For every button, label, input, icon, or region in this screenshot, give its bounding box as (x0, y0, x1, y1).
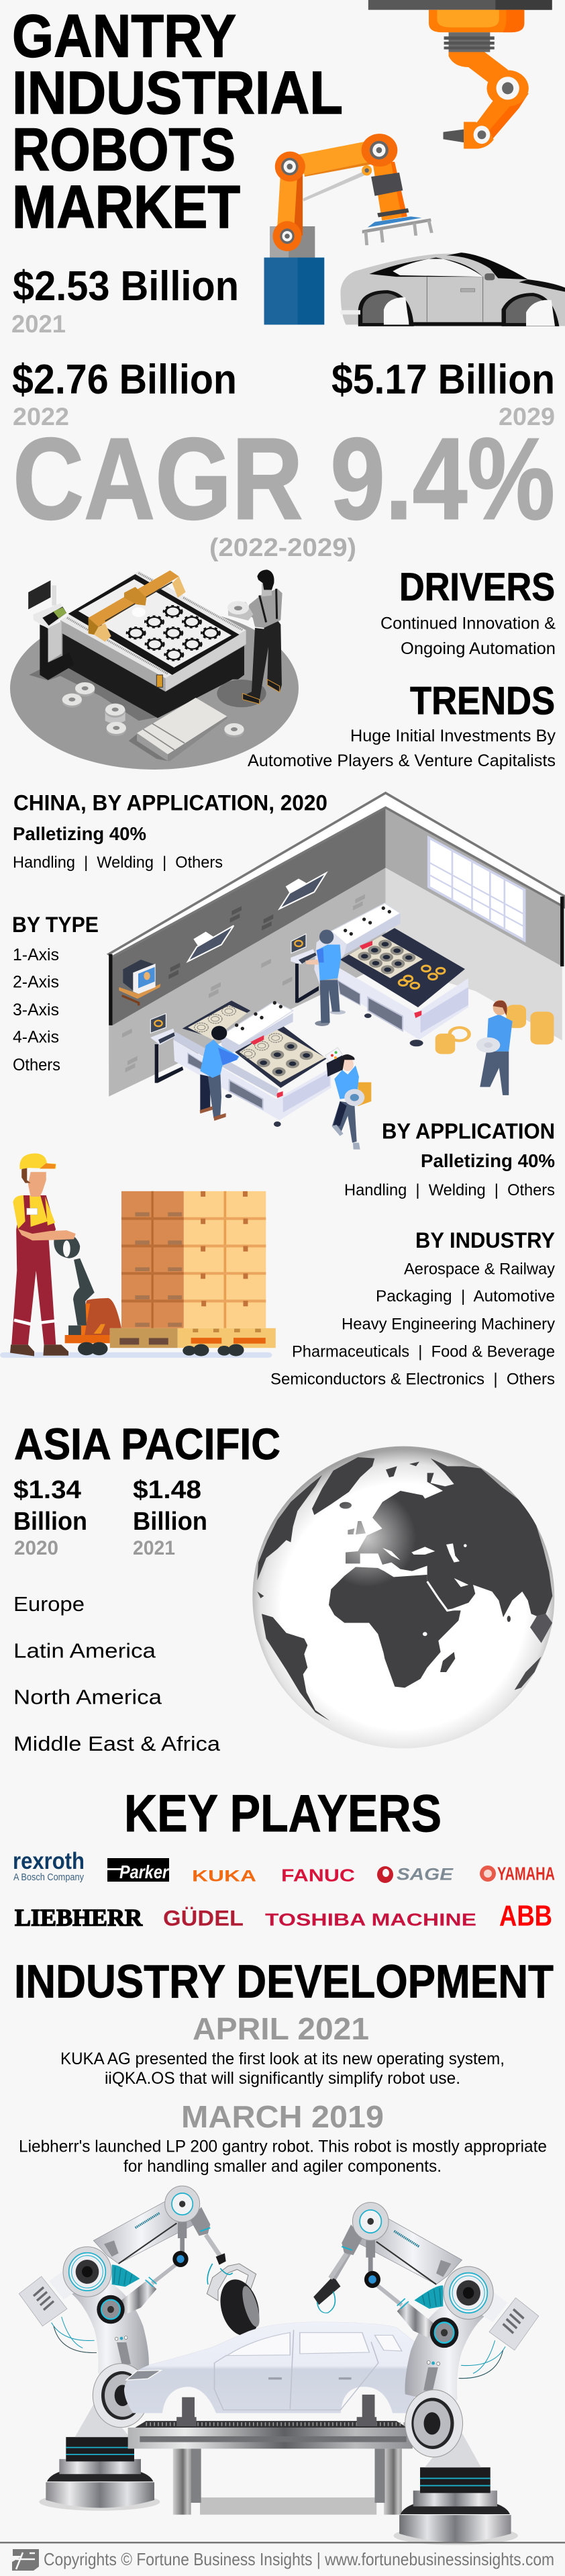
logo: KUKA: KUKA (192, 1867, 256, 1886)
headlight (126, 2371, 161, 2380)
footer logo (12, 2549, 39, 2571)
by type: Others (13, 1056, 60, 1074)
title: INDUSTRIAL (12, 60, 343, 127)
logos (13, 1848, 555, 1933)
market size 2022 (12, 357, 237, 430)
trends (248, 680, 556, 770)
title: GANTRY (12, 3, 236, 70)
Asia Pacific heading and values: Billion (13, 1508, 87, 1536)
by application (344, 1119, 555, 1199)
by industry: Heavy Engineering Machinery (342, 1315, 555, 1334)
right tool head (313, 2242, 355, 2313)
illustration: worker with pallet truck and boxes (0, 1154, 276, 1358)
illustration: grey sports car (340, 252, 565, 326)
other regions list: Middle East & Africa (13, 1732, 221, 1755)
by type (12, 913, 99, 1074)
development: April 2021: APRIL 2021 (193, 2011, 369, 2046)
development: March 2019: for handling smaller and agiler components. (123, 2157, 442, 2176)
by application: Palletizing 40% (421, 1150, 555, 1171)
title: ROBOTS (12, 117, 236, 184)
illustration: isometric factory room (109, 793, 565, 1150)
market size 2022: $2.76 Billion (12, 357, 237, 403)
by industry (270, 1228, 555, 1389)
market size 2029 (331, 357, 555, 430)
market size 2029: 2029 (499, 403, 555, 430)
logo: Rexroth: rexroth (13, 1848, 85, 1874)
by industry: Semiconductors & Electronics | Others (270, 1370, 555, 1389)
car windows (227, 2332, 402, 2356)
illustration: chrome robots assembling car (19, 2186, 539, 2545)
by type: 3-Axis (13, 1001, 59, 1019)
CAGR period: (2022-2029) (209, 534, 356, 562)
title (12, 3, 343, 241)
market size 2022: 2022 (13, 403, 69, 430)
Asia Pacific heading and values: $1.34 (13, 1476, 81, 1504)
other regions list: Latin America (13, 1639, 156, 1663)
market size 2021: 2021 (11, 310, 66, 338)
logo: SAGE (377, 1866, 454, 1884)
illustration: orange robot on blue base (264, 134, 431, 324)
China by application: Palletizing 40% (13, 823, 146, 844)
Asia Pacific heading and values: 2021 (133, 1537, 175, 1559)
China by application: Handling | Welding | Others (13, 854, 223, 872)
drivers (380, 565, 556, 658)
by application: BY APPLICATION (382, 1119, 555, 1143)
by application: Handling | Welding | Others (344, 1181, 555, 1199)
by type: BY TYPE (12, 913, 99, 937)
Asia Pacific heading and values: 2020 (14, 1537, 58, 1559)
logo: Rexroth (13, 1848, 85, 1883)
development: March 2019: MARCH 2019 (181, 2099, 384, 2134)
factory walls and window (109, 793, 565, 1134)
wall lamps, tv and machines (119, 873, 468, 1150)
development: April 2021: iiQKA.OS that will significantly simplify robot use. (105, 2069, 460, 2088)
key players heading: KEY PLAYERS (124, 1784, 442, 1843)
logo: Gudel: GÜDEL (163, 1906, 244, 1930)
development: March 2019 (19, 2099, 547, 2176)
by industry: Pharmaceuticals | Food & Beverage (292, 1343, 555, 1361)
logo: Toshiba Machine: TOSHIBA MACHINE (265, 1910, 476, 1930)
China by application: CHINA, BY APPLICATION, 2020 (13, 791, 327, 815)
by industry: Aerospace & Railway (404, 1260, 555, 1279)
by industry: Packaging | Automotive (376, 1287, 555, 1305)
logo: Yamaha (480, 1863, 555, 1884)
development: March 2019: Liebherr's launched LP 200 gantry robot. This robot is mostly appropriate (19, 2137, 547, 2156)
front laser machine (150, 1001, 371, 1150)
assembly table (128, 2421, 413, 2515)
by type: 4-Axis (13, 1027, 59, 1046)
car body (124, 2322, 415, 2413)
Asia Pacific heading and values (13, 1419, 280, 1559)
by type: 1-Axis (13, 946, 59, 964)
development: April 2021 (60, 2011, 505, 2088)
car door handles (268, 2377, 352, 2379)
Asia Pacific heading and values: ASIA PACIFIC (14, 1419, 280, 1469)
right worker and gear stacks (435, 1000, 554, 1095)
other regions list: North America (13, 1686, 162, 1708)
trends: Huge Initial Investments By (350, 727, 556, 745)
logo: FANUC: FANUC (281, 1866, 355, 1886)
logo: ABB: ABB (499, 1899, 552, 1933)
market size 2021 (11, 263, 239, 338)
footer (12, 2549, 554, 2571)
logo: Liebherr: LIEBHERR (15, 1904, 143, 1931)
development: April 2021: KUKA AG presented the first look at its new operating system, (60, 2050, 505, 2068)
by type: 2-Axis (13, 972, 59, 991)
footer rule (0, 2542, 565, 2544)
logo: Parker (107, 1858, 170, 1882)
title: MARKET (12, 174, 240, 241)
illustration: globe (252, 1446, 554, 1749)
drivers: Continued Innovation & (380, 614, 556, 633)
logo: SAGE: SAGE (397, 1866, 454, 1884)
rear laser machine (291, 903, 468, 1046)
market size 2021: $2.53 Billion (13, 263, 239, 310)
Asia Pacific heading and values: Billion (133, 1508, 207, 1536)
China by application (13, 791, 327, 872)
supports (176, 2395, 376, 2426)
other regions list (13, 1592, 221, 1755)
right robot arm (330, 2203, 539, 2545)
drivers: Ongoing Automation (401, 639, 556, 658)
trends: Automotive Players & Venture Capitalists (248, 751, 556, 770)
by industry: BY INDUSTRY (415, 1228, 555, 1252)
Asia Pacific heading and values: $1.48 (133, 1476, 201, 1504)
left robot arm (19, 2186, 221, 2511)
illustration: hanging orange robot arm (368, 0, 552, 149)
logo: Rexroth: A Bosch Company (13, 1872, 84, 1883)
illustration: laser cutter with worker (10, 569, 299, 770)
tire and gripper (207, 2253, 266, 2341)
other regions list: Europe (13, 1592, 85, 1616)
logo: Parker: Parker (119, 1861, 170, 1882)
